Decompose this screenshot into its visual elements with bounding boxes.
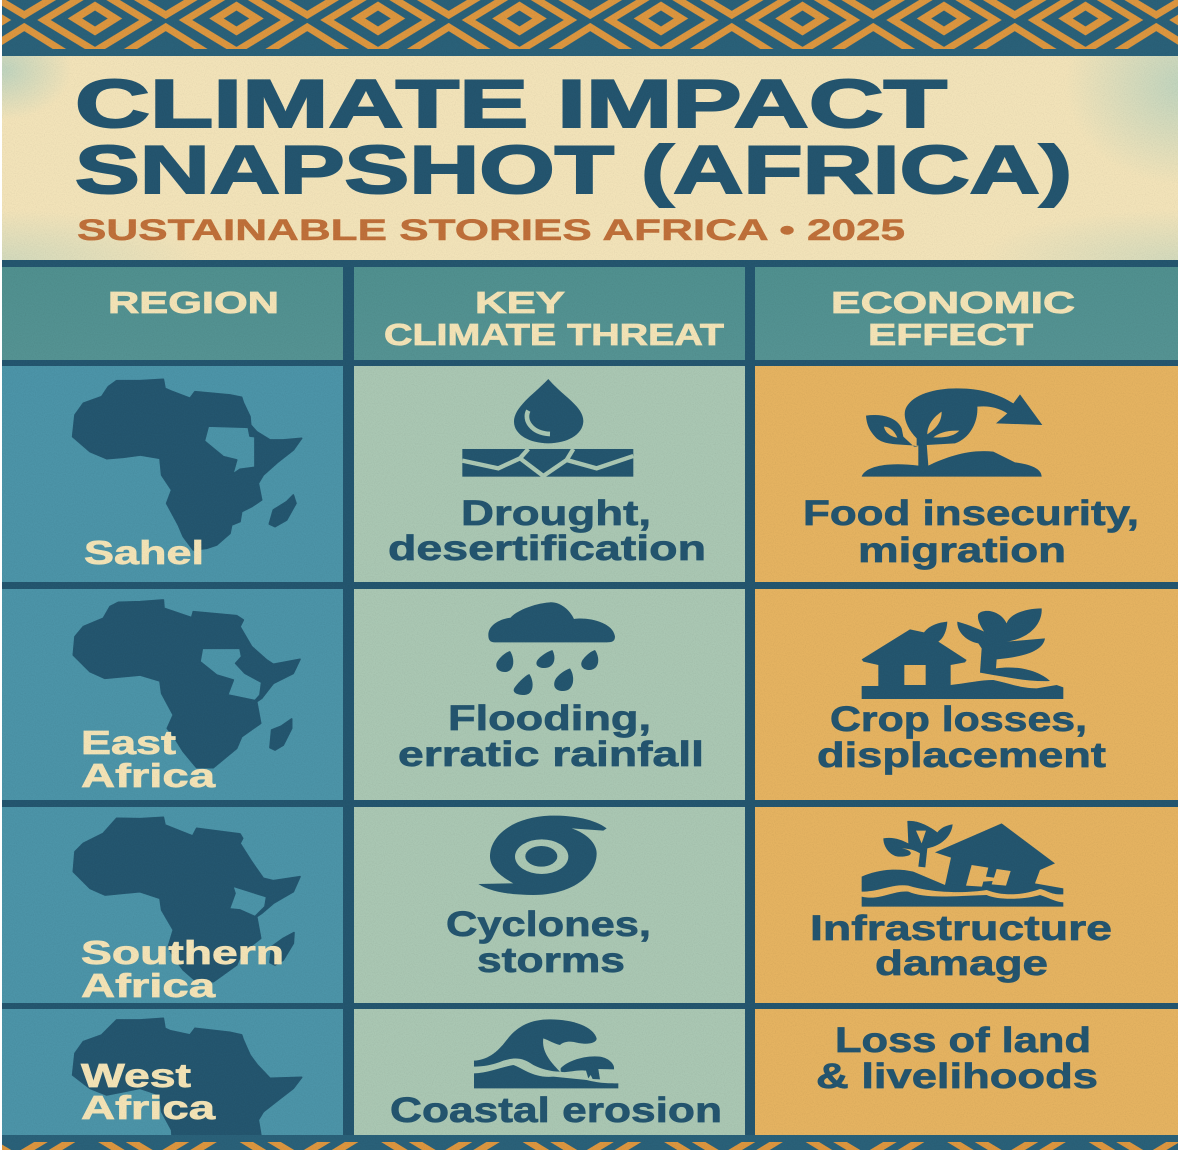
- bottom decorative pattern band: [2, 1135, 1178, 1150]
- icon: flooded house: [862, 821, 1063, 907]
- label: flooding: Flooding,: [448, 699, 651, 738]
- threat cell: cyclones: [354, 807, 745, 1003]
- icon: cyclone: [478, 816, 607, 895]
- table frame: [2, 260, 1178, 1150]
- icon: wave: [474, 1019, 618, 1088]
- effect cell: infrastructure damage: damage: [875, 944, 1048, 983]
- icon: Africa map with Southern Africa highlighted: [73, 817, 300, 982]
- region cell: Sahel: [2, 366, 343, 582]
- icon: Africa map cropped by the cell: [73, 1018, 302, 1150]
- header: economic effect: [755, 267, 1178, 360]
- effect cell: loss of land: & livelihoods: [816, 1057, 1098, 1096]
- region cell: East Africa: Africa: [81, 757, 216, 794]
- threat cell: drought: [354, 366, 745, 582]
- icon: Africa map with East Africa highlighted: [73, 600, 300, 768]
- header: key climate threat: [354, 267, 745, 360]
- label: infrastructure damage: Infrastructure: [810, 909, 1112, 948]
- icon: house and plant: [862, 608, 1063, 699]
- effect cell: infrastructure damage: [755, 807, 1178, 1003]
- title line 2: SNAPSHOT (AFRICA): [75, 132, 1072, 208]
- effect cell: food insecurity: migration: [858, 531, 1066, 570]
- effect cell: loss of land: [755, 1009, 1178, 1135]
- label: Southern Africa: Southern: [81, 934, 284, 971]
- label: West Africa: West: [81, 1057, 191, 1094]
- subtitle: SUSTAINABLE STORIES AFRICA • 2025: [77, 214, 905, 247]
- threat cell: cyclones: storms: [477, 941, 625, 980]
- region cell: West Africa: [2, 1009, 343, 1135]
- label: coastal erosion: Coastal erosion: [390, 1091, 722, 1130]
- label: East Africa: East: [81, 724, 176, 761]
- header: region: REGION: [108, 285, 279, 320]
- effect cell: food insecurity: [755, 366, 1178, 582]
- effect cell: loss of land: Loss of land: [835, 1021, 1091, 1060]
- icon: rain cloud: [488, 602, 615, 695]
- region cell: West Africa: Africa: [81, 1089, 216, 1126]
- label: Sahel: Sahel: [84, 534, 204, 571]
- threat cell: flooding: [354, 589, 745, 800]
- label: crop losses: Crop losses,: [830, 700, 1087, 739]
- header: economic effect: EFFECT: [868, 317, 1033, 352]
- label: food insecurity: Food insecurity,: [803, 494, 1139, 533]
- icon: water drop over cracked earth: [462, 379, 633, 477]
- threat cell: flooding: erratic rainfall: [398, 735, 704, 774]
- header: key climate threat: CLIMATE THREAT: [384, 317, 724, 352]
- effect cell: crop losses: displacement: [817, 736, 1106, 775]
- header: key climate threat: KEY: [475, 285, 565, 320]
- title line 1: CLIMATE IMPACT: [75, 66, 947, 142]
- label: cyclones: Cyclones,: [446, 905, 651, 944]
- region cell: Southern Africa: [2, 807, 343, 1004]
- header: region: [2, 267, 343, 360]
- region cell: Southern Africa: Africa: [81, 967, 216, 1004]
- icon: Africa map with Sahel highlighted: [73, 379, 302, 550]
- effect cell: crop losses: [755, 589, 1178, 800]
- threat cell: coastal erosion: [354, 1009, 745, 1135]
- header: economic effect: ECONOMIC: [831, 285, 1075, 320]
- threat cell: drought: desertification: [388, 529, 706, 568]
- icon: sprout with falling arrow: [862, 388, 1042, 477]
- label: drought: Drought,: [461, 494, 651, 533]
- top decorative pattern band: [2, 0, 1178, 56]
- region cell: East Africa: [2, 589, 343, 800]
- title panel: [2, 56, 1178, 260]
